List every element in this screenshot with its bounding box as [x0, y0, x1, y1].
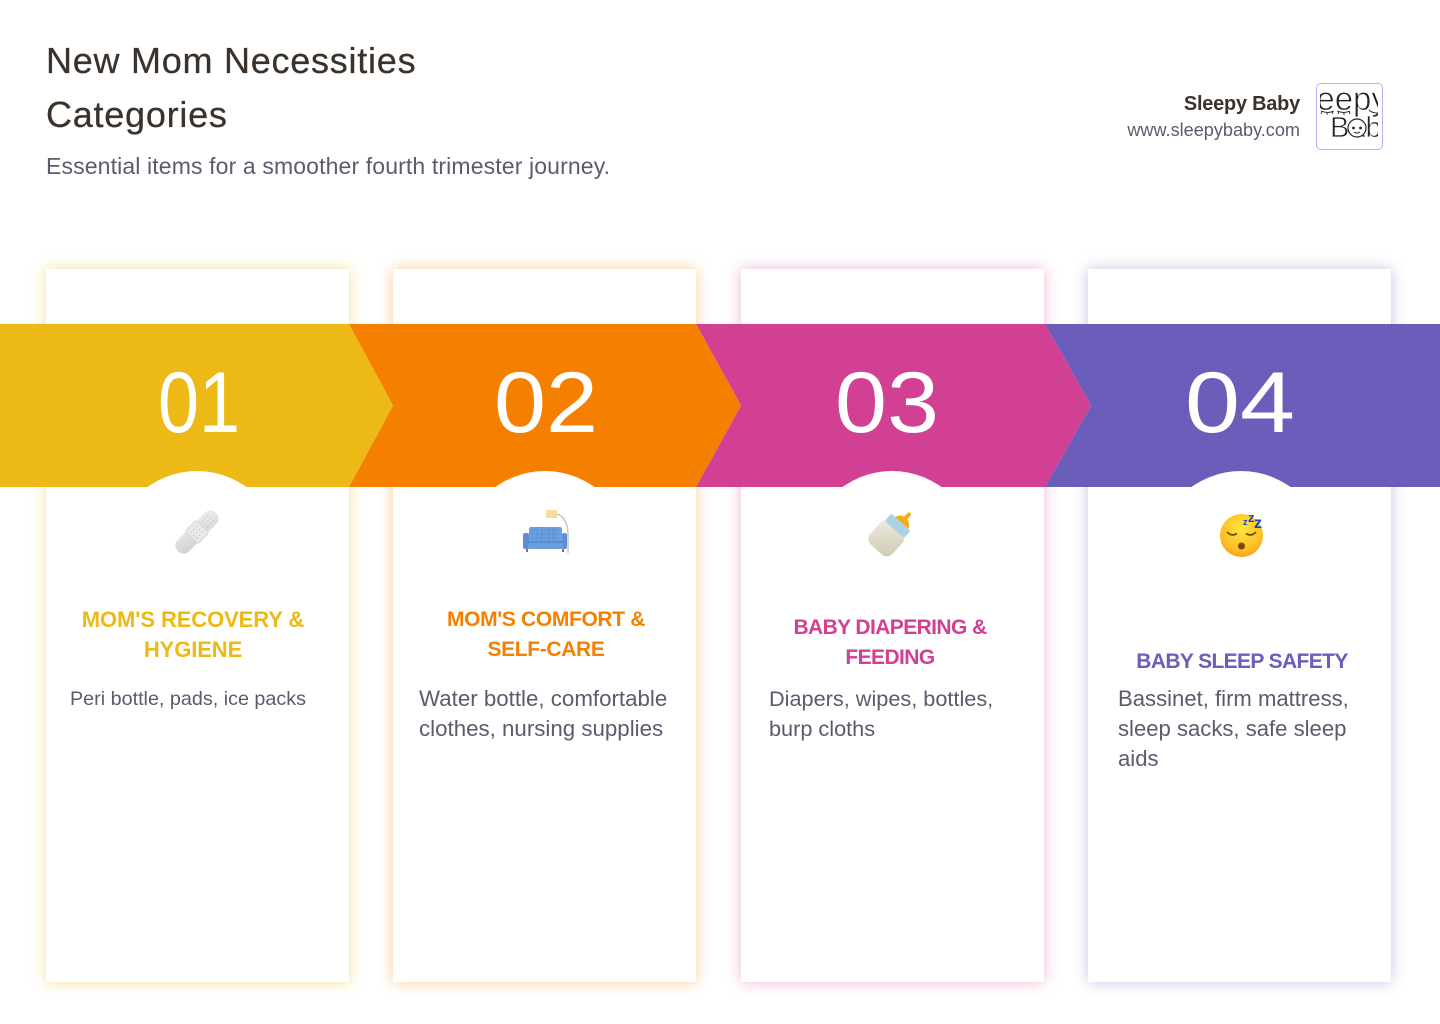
chevron 01 — [0, 324, 393, 487]
chevron 04: 04 — [1185, 355, 1295, 451]
card 1 heading — [82, 607, 304, 662]
title: New Mom Necessities — [46, 40, 416, 81]
card 4 text: Bassinet, firm mattress, — [1118, 686, 1349, 711]
card 2 heading — [447, 608, 645, 661]
chevron band — [0, 324, 1440, 557]
card 3 text: burp cloths — [769, 716, 875, 741]
icon: sleeping face: z — [1243, 517, 1248, 527]
panel: card 3 — [741, 269, 1044, 982]
card 4 text: aids — [1118, 746, 1159, 771]
icon: baby bottle — [865, 502, 921, 560]
card 3 text: Diapers, wipes, bottles, — [769, 686, 993, 711]
chevron 02 — [349, 324, 741, 487]
chevron 01: 01 — [158, 355, 240, 451]
subtitle: Essential items for a smoother fourth trimester journey. — [46, 153, 610, 179]
card 2 heading: SELF-CARE — [487, 638, 604, 661]
panel: card 1 — [46, 269, 349, 982]
panel: card 4 — [1088, 269, 1391, 982]
card 1 text: Peri bottle, pads, ice packs — [70, 688, 306, 710]
card 4 text: sleep sacks, safe sleep — [1118, 716, 1346, 741]
icon: sleeping face: z — [1248, 510, 1255, 525]
card 3 heading: BABY DIAPERING & — [793, 616, 987, 639]
chevron 04 — [1045, 324, 1440, 487]
logo: Bab — [1330, 112, 1382, 144]
card 2 text — [419, 686, 667, 741]
card 2 heading: MOM'S COMFORT & — [447, 608, 645, 631]
card 2 text: clothes, nursing supplies — [419, 716, 663, 741]
card 4 heading: BABY SLEEP SAFETY — [1136, 650, 1348, 673]
brand block — [1127, 83, 1383, 150]
card 1 heading: MOM'S RECOVERY & — [82, 607, 304, 632]
logo — [1316, 83, 1383, 150]
chevron 03 — [696, 324, 1091, 487]
card 3 text — [769, 686, 993, 741]
card 4 text — [1118, 686, 1349, 771]
header: title and subtitle — [46, 40, 610, 179]
title — [46, 40, 416, 135]
card 2 text: Water bottle, comfortable — [419, 686, 667, 711]
icon: sleeping face — [1220, 510, 1263, 557]
card 1 heading: HYGIENE — [144, 637, 242, 662]
chevron 03: 03 — [835, 355, 939, 451]
brand url: www.sleepybaby.com — [1127, 120, 1300, 140]
card 3 heading — [793, 616, 987, 669]
card 3 heading: FEEDING — [845, 646, 935, 669]
title: Categories — [46, 94, 228, 135]
panel: card 2 — [393, 269, 696, 982]
icon: bandage — [172, 507, 222, 557]
chevron 02: 02 — [494, 355, 598, 451]
icon: sleeping face: z — [1254, 515, 1262, 532]
icon: couch and lamp — [523, 510, 568, 553]
brand name: Sleepy Baby — [1184, 93, 1300, 115]
